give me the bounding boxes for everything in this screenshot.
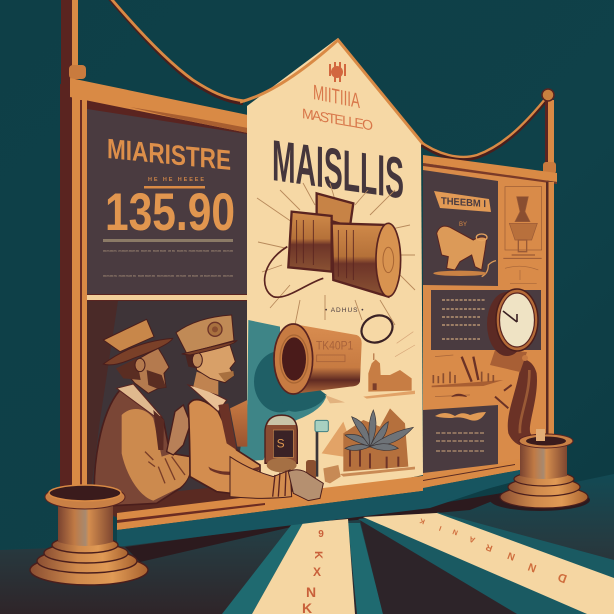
panel: animal [423, 170, 498, 286]
floor strip: left [222, 519, 383, 614]
rays around barrel [257, 183, 415, 325]
strip letters: 9 [318, 529, 324, 540]
floor strip: right [358, 512, 614, 614]
list lines [442, 300, 485, 339]
right ledge [423, 459, 520, 488]
center cream panel [247, 38, 423, 512]
banner [434, 191, 491, 212]
board frame: right [423, 163, 547, 478]
rope: right [418, 100, 546, 159]
header text: MIITIIIA [313, 81, 361, 113]
landscape sketch [505, 266, 538, 283]
right post [542, 89, 556, 174]
floor shadow [125, 490, 520, 562]
pot: right [490, 429, 590, 511]
signal device [265, 415, 341, 483]
panel: price [87, 109, 247, 294]
board frame: left [60, 84, 250, 510]
strip letters: D [556, 570, 569, 586]
strip letters: X [313, 565, 321, 579]
wave icons [435, 412, 486, 421]
panel shading [87, 301, 118, 520]
heading: price panel: MIARISTRE [107, 133, 231, 176]
bottom ledge [95, 475, 520, 547]
clock shadow [490, 350, 527, 372]
header text: MASTELLEO [302, 105, 373, 134]
arm and hand [230, 457, 323, 501]
two men [94, 315, 260, 507]
strip letters: I [438, 524, 443, 531]
banner text: THEEBM I [441, 196, 486, 210]
strip letters [419, 516, 569, 586]
scroll illustration [274, 324, 362, 394]
man: left [94, 319, 191, 507]
strip letters: A [468, 534, 476, 545]
body line: mmmm mmmmmm mmm mmmm mm mmm mmmmmm mmm mmm [103, 249, 233, 253]
divider [103, 239, 233, 242]
icon: bull [433, 226, 496, 277]
man: right [176, 315, 260, 497]
finial ball [542, 89, 554, 101]
body line: mmmm mmmmm mmmmm mmmmm mmm mmm mmmmmm mmm [103, 274, 233, 278]
trophy illustration [503, 187, 542, 258]
sketch: figures [432, 355, 512, 408]
panel: text list [431, 290, 541, 350]
strip letters: K [312, 551, 324, 559]
panel: portraits [87, 301, 247, 520]
scroll illustration: TK40P1 [316, 338, 354, 352]
note lines [436, 433, 485, 451]
signal device: S [277, 436, 285, 450]
strip letters [302, 529, 324, 614]
ring [357, 310, 397, 348]
clock [487, 289, 538, 361]
strip letters: N [452, 527, 459, 536]
small text: BY [459, 222, 467, 228]
pot: left [30, 485, 148, 585]
rope: left [108, 0, 243, 103]
barrel illustration [265, 193, 401, 297]
panel divider strip [87, 295, 247, 300]
house and plant illustration [322, 408, 415, 477]
teal blob and corner [230, 320, 345, 462]
strip letters: R [484, 542, 494, 554]
strip letters: K [419, 516, 426, 525]
header emblem [329, 62, 346, 82]
left post [61, 0, 86, 90]
strip letters: N [306, 584, 316, 600]
roof outline [240, 40, 423, 144]
strip letters: N [506, 549, 517, 562]
panel: notes [423, 405, 498, 473]
church illustration [363, 332, 415, 399]
strip letters: N [527, 560, 538, 574]
caption under barrel: • ADHUS • [325, 307, 365, 314]
floor [0, 474, 614, 614]
small label: HE HE HEEEE [148, 177, 204, 183]
underline [144, 186, 205, 188]
text: MAISLLIS [272, 128, 404, 211]
clock hose [508, 360, 537, 447]
price value: 135.90 [105, 183, 235, 242]
lamp post [316, 430, 318, 477]
